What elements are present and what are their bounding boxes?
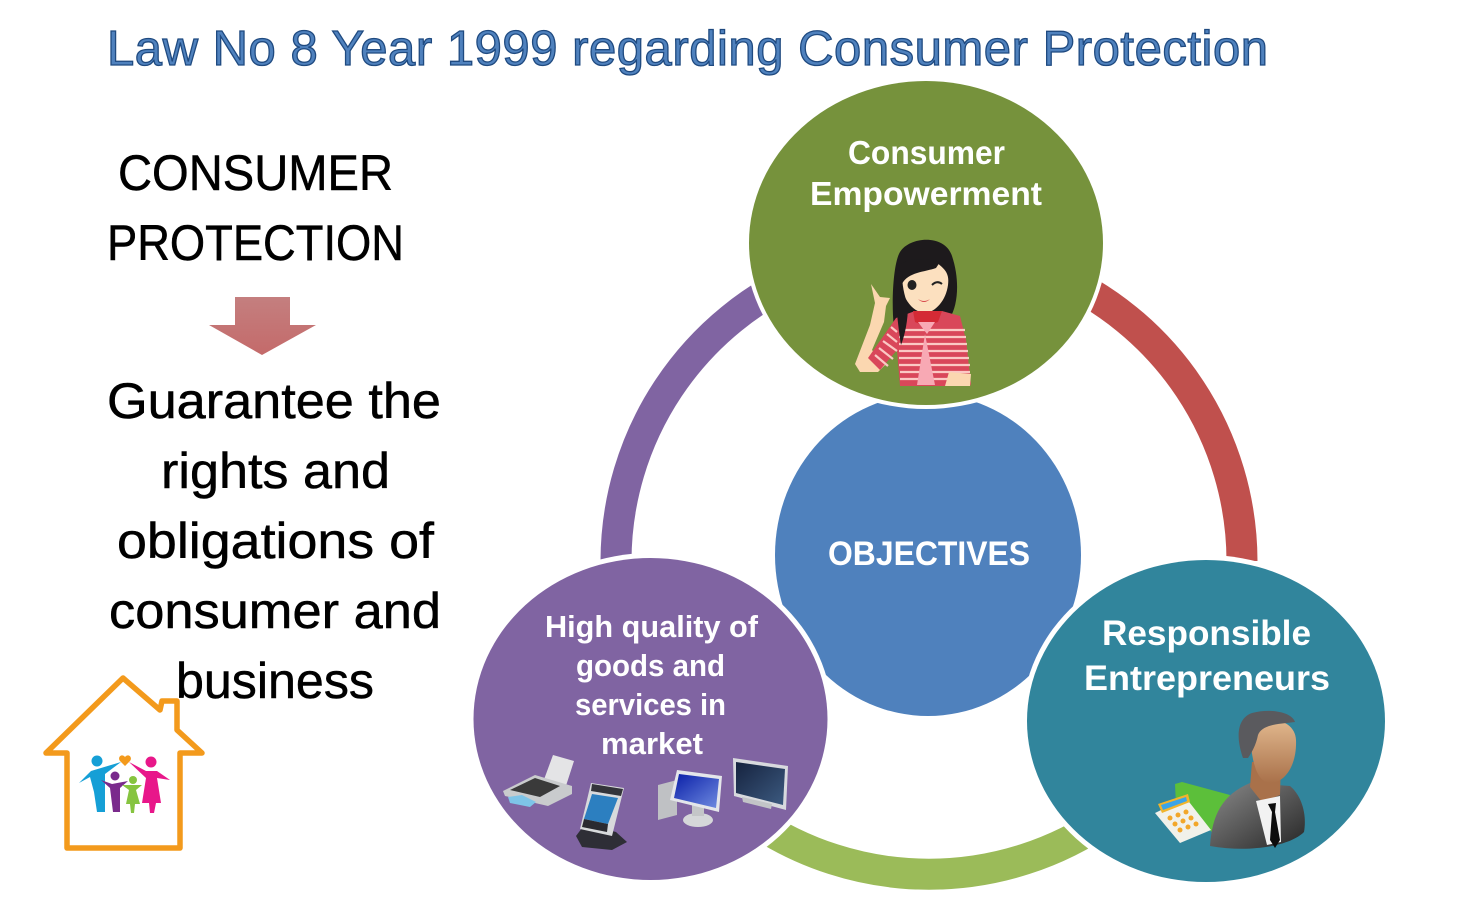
icon: flat screen bbox=[733, 758, 788, 810]
panel: consumer empowerment bbox=[745, 77, 1107, 409]
text: consumer empowerment: Empowerment bbox=[810, 175, 1042, 212]
text block: guarantee: obligations of bbox=[117, 513, 434, 569]
icon: businessman bbox=[1155, 711, 1305, 849]
ring: three segments bbox=[616, 273, 1242, 874]
text block: guarantee: rights and bbox=[161, 443, 390, 499]
text: responsible entrepreneurs: Responsible bbox=[1102, 614, 1311, 653]
text: consumer empowerment bbox=[810, 134, 1042, 212]
icon: handheld device bbox=[576, 783, 627, 850]
text: consumer empowerment: Consumer bbox=[848, 134, 1005, 171]
text: responsible entrepreneurs bbox=[1084, 614, 1330, 698]
panel: responsible entrepreneurs bbox=[1022, 555, 1390, 887]
icon: printer bbox=[503, 755, 574, 807]
text: high quality bbox=[545, 609, 759, 761]
heading: consumer protection: CONSUMER bbox=[118, 145, 393, 201]
heading: consumer protection: PROTECTION bbox=[107, 215, 404, 271]
text: high quality: goods and bbox=[576, 648, 725, 683]
heading: consumer protection bbox=[107, 145, 404, 271]
panel: high quality bbox=[468, 553, 832, 885]
text: high quality: services in bbox=[575, 687, 726, 722]
ring segment: green bbox=[750, 818, 1108, 874]
text: high quality: market bbox=[601, 726, 703, 761]
text: high quality: High quality of bbox=[545, 609, 759, 644]
title: Law No 8 Year 1999 regarding Consumer Protection bbox=[107, 22, 1268, 76]
text: responsible entrepreneurs: Entrepreneurs bbox=[1084, 659, 1330, 698]
text block: guarantee: Guarantee the bbox=[107, 373, 441, 429]
text block: guarantee: business bbox=[176, 653, 374, 709]
ring segment: red bbox=[1050, 273, 1242, 561]
circle: objectives: OBJECTIVES bbox=[828, 535, 1030, 573]
text block: guarantee: consumer and bbox=[109, 583, 441, 639]
ring segment: purple bbox=[616, 273, 808, 561]
arrow: down bbox=[209, 297, 316, 355]
text block: guarantee bbox=[107, 373, 441, 709]
icon: desktop computer bbox=[658, 770, 722, 827]
icon: woman bbox=[855, 240, 971, 386]
circle: objectives bbox=[770, 389, 1086, 721]
icon: family house bbox=[46, 678, 202, 848]
